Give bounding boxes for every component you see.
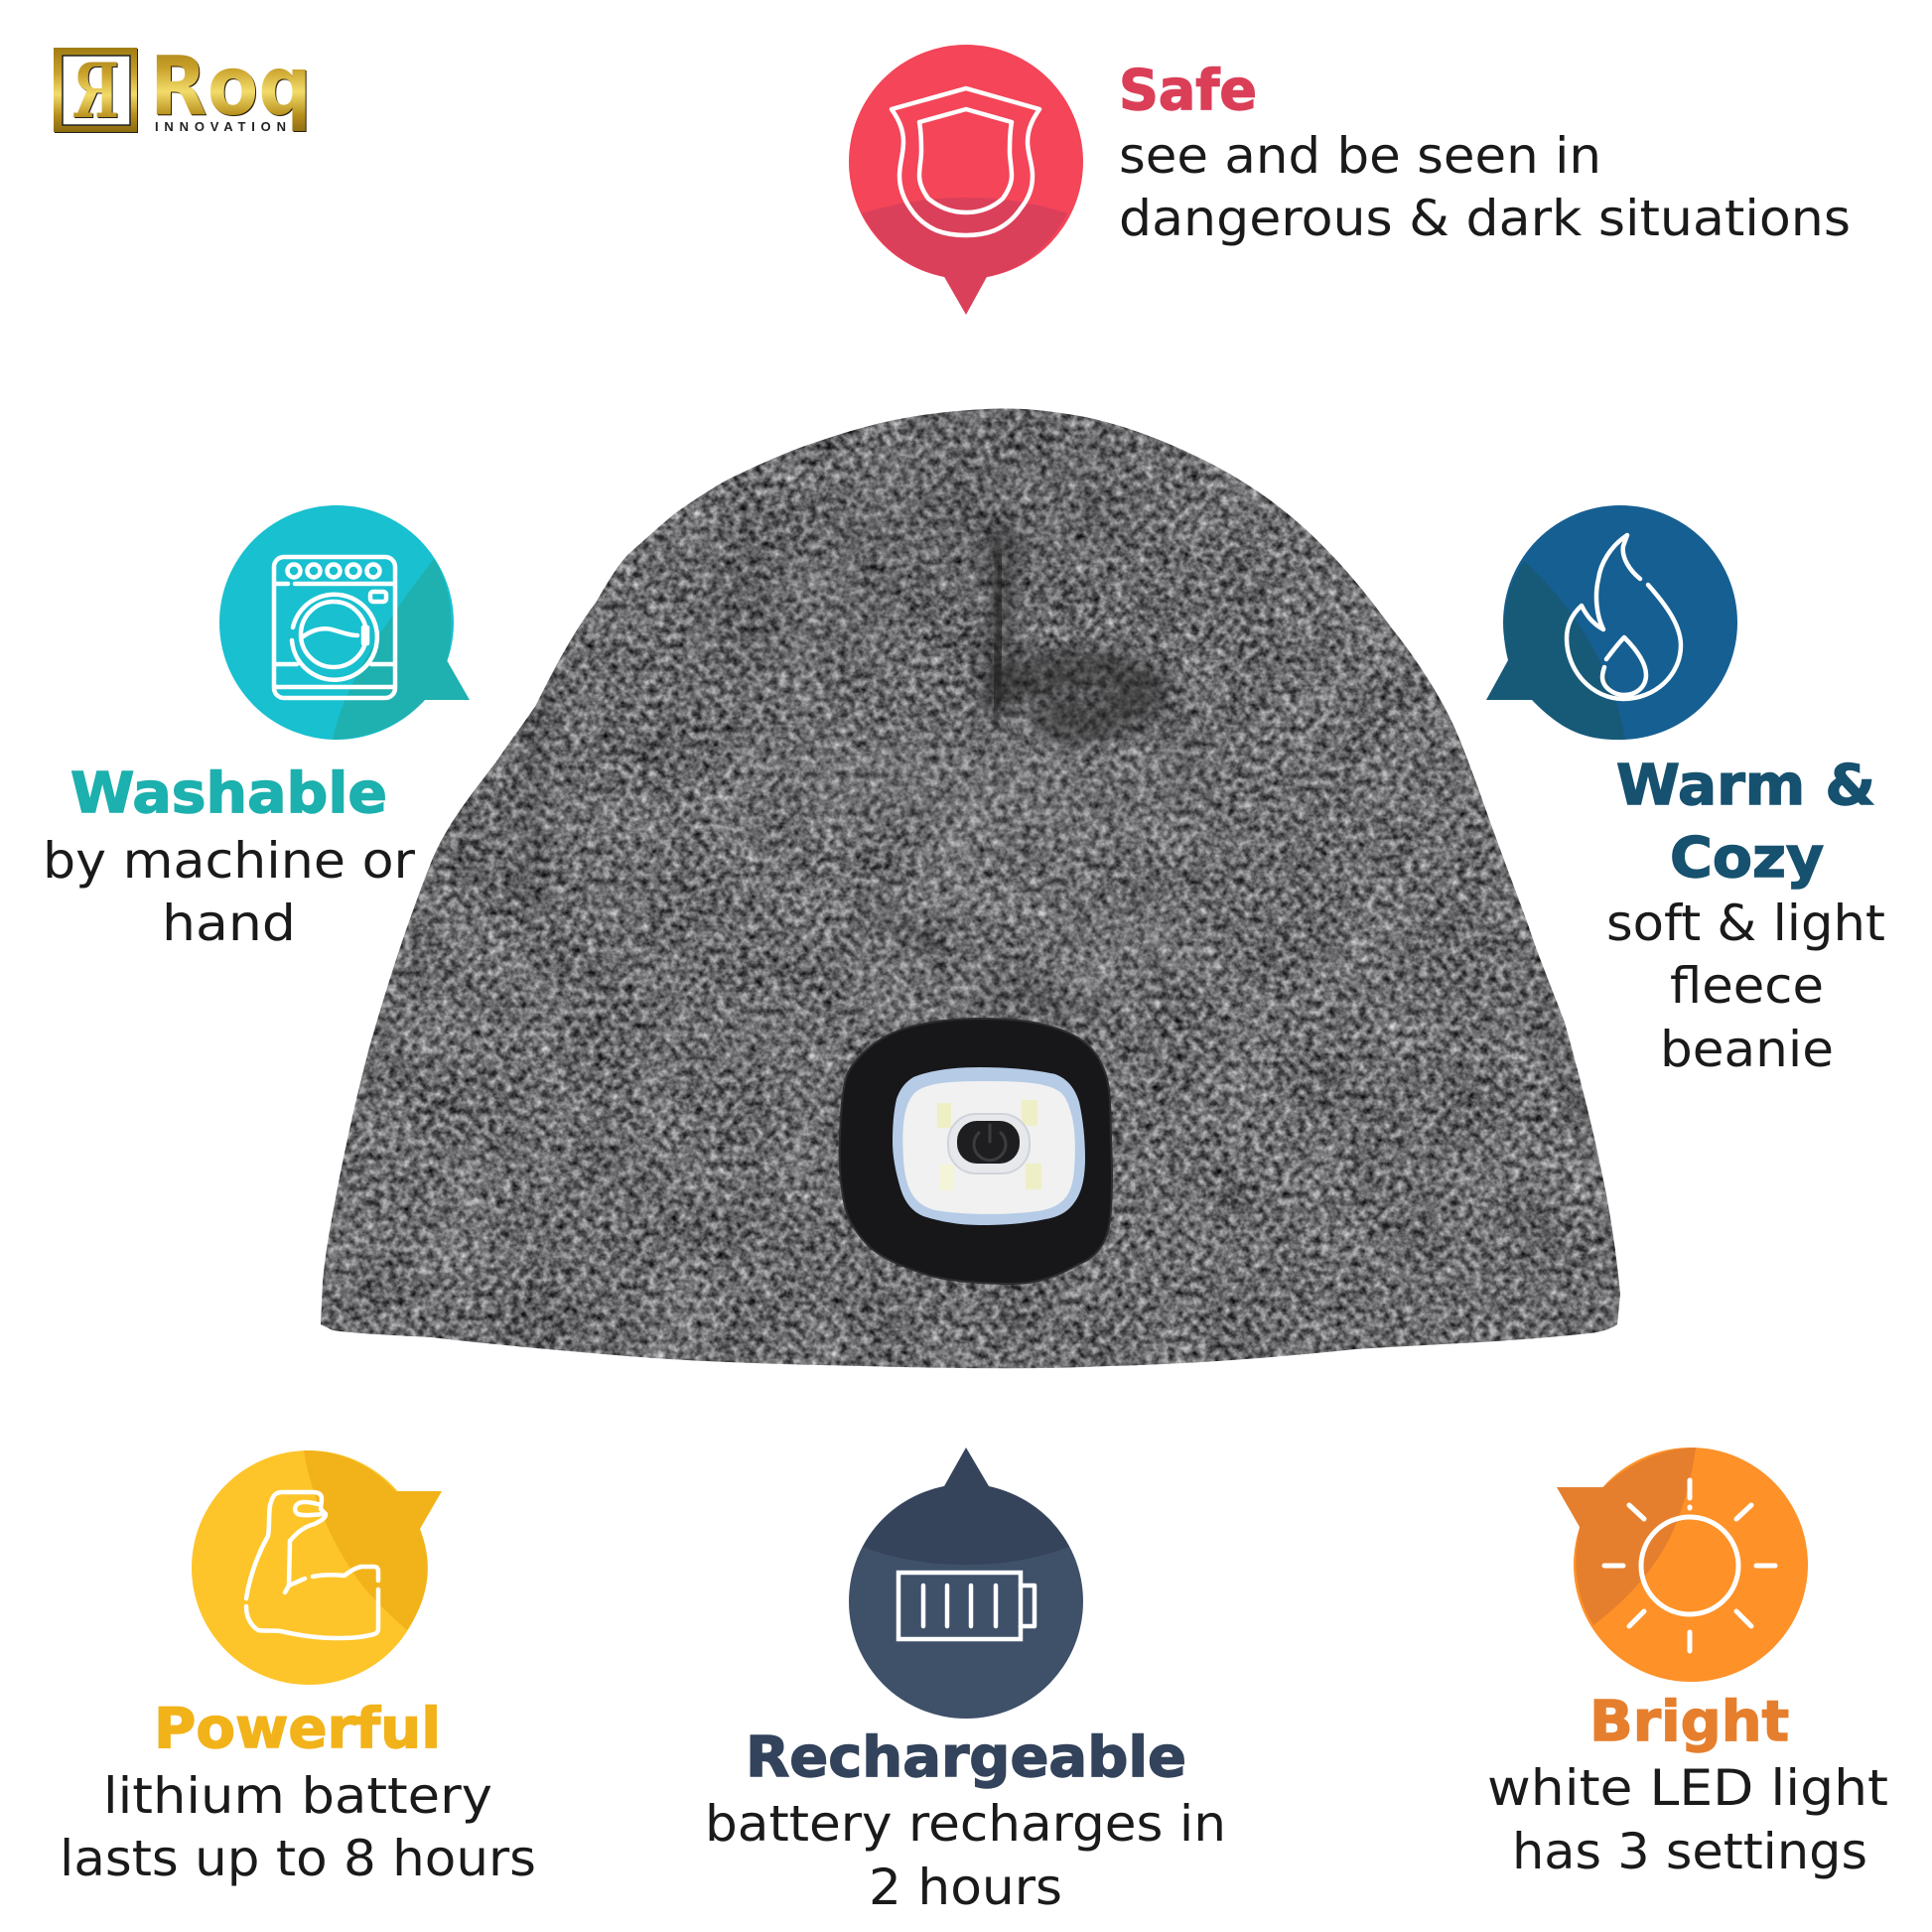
beanie fleece body (298, 397, 1638, 1380)
text: washable description: by machine or (43, 832, 415, 890)
text: safe description: see and be seen in (1119, 127, 1601, 185)
heading: Warm & Cozy: Warm & (1616, 754, 1875, 818)
text: warm description: beanie (1660, 1021, 1834, 1078)
logo: Roq Innovation: Roq (150, 40, 312, 134)
icon: shield badge (849, 45, 1083, 315)
headlamp (840, 1019, 1112, 1284)
text: washable description: hand (162, 895, 296, 952)
panel: Warm & Cozy (1486, 505, 1885, 1078)
text: bright description: has 3 settings (1512, 1823, 1867, 1880)
panel: Washable (43, 505, 470, 952)
text: powerful description: lithium battery (103, 1767, 492, 1825)
text: safe description: dangerous & dark situations (1119, 190, 1851, 247)
heading: Washable: Washable (70, 761, 387, 826)
panel: Powerful (60, 1450, 536, 1887)
icon: flame badge (1486, 505, 1737, 740)
text: bright description: white LED light (1487, 1759, 1888, 1817)
heading: Warm & Cozy: Cozy (1670, 826, 1824, 891)
text: warm description: fleece (1670, 957, 1824, 1015)
panel: Safe (849, 45, 1851, 315)
text: rechargeable description: 2 hours (869, 1859, 1062, 1916)
beanie photo (298, 397, 1638, 1380)
logo: Roq Innovation (54, 40, 312, 135)
panel: Rechargeable (705, 1448, 1226, 1916)
heading: Safe: Safe (1119, 59, 1257, 123)
icon: battery badge (849, 1448, 1083, 1719)
heading: Bright: Bright (1589, 1690, 1789, 1754)
heading: Powerful: Powerful (154, 1697, 441, 1761)
logo: Roq Innovation: Я (72, 47, 119, 135)
heading: Rechargeable: Rechargeable (746, 1725, 1186, 1790)
text: rechargeable description: battery recharges in (705, 1795, 1226, 1853)
panel: Bright (1487, 1448, 1888, 1880)
icon: sun badge (1557, 1448, 1808, 1682)
text: powerful description: lasts up to 8 hours (60, 1830, 536, 1887)
icon: flexed arm badge (192, 1450, 442, 1685)
logo: Roq Innovation: INNOVATION (155, 119, 286, 134)
icon: washing machine badge (219, 505, 470, 740)
text: warm description: soft & light (1606, 895, 1885, 952)
